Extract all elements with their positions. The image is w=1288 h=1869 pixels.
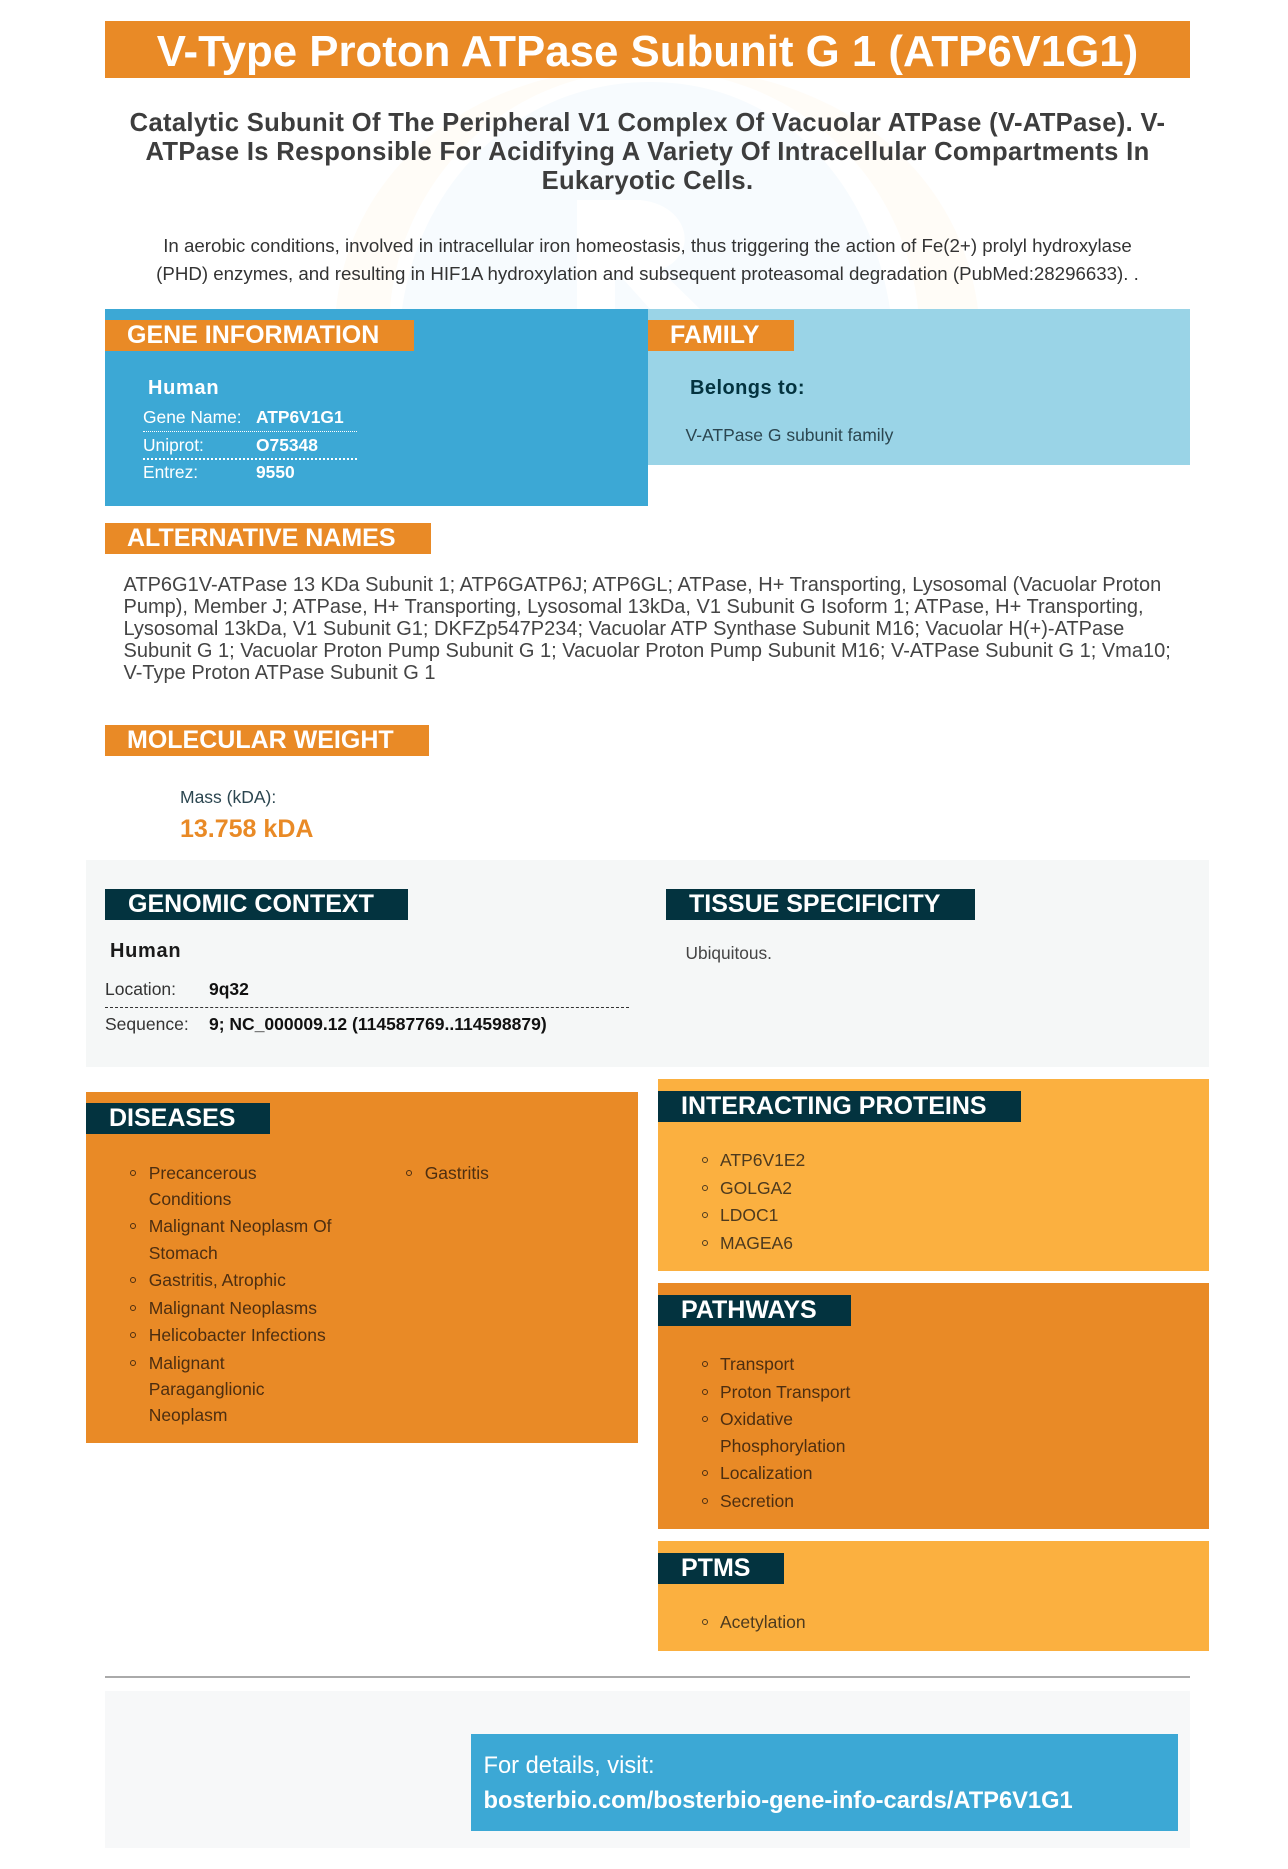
heading: pathways: PATHWAYS [681, 1296, 817, 1324]
alternative names text: Pump), Member J; ATPase, H+ Transporting, Lysosomal 13kDa, V1 Subunit G Isoform 1; ATPase, H+ Transporting, [124, 596, 1144, 618]
pathway list: Proton Transport [720, 1382, 850, 1402]
protein list [702, 1150, 805, 1253]
protein list: MAGEA6 [720, 1233, 793, 1253]
panel: genomic context and tissue specificity: 9q32 [209, 978, 249, 998]
heading: genomic context: GENOMIC CONTEXT [128, 890, 374, 918]
protein list: GOLGA2 [720, 1178, 792, 1198]
gene table: Entrez: [143, 462, 198, 482]
alternative names text: ATP6G1V-ATPase 13 KDa Subunit 1; ATP6GATP6J; ATP6GL; ATPase, H+ Transporting, Lysosomal (Vacuolar Proton [124, 574, 1161, 596]
disease list: Precancerous [149, 1163, 257, 1183]
disease list [130, 1163, 489, 1425]
heading: ptms [658, 1553, 784, 1584]
alternative names text: V-Type Proton ATPase Subunit G 1 [124, 662, 436, 684]
sequence row [105, 1007, 629, 1008]
pathway list [702, 1354, 850, 1511]
panel: genomic context and tissue specificity: Sequence: [105, 1014, 189, 1034]
heading: interacting proteins: INTERACTING PROTEINS [681, 1092, 987, 1120]
panel: diseases [86, 1092, 638, 1443]
panel: ptms [658, 1541, 1209, 1651]
ptm list: Acetylation [720, 1612, 806, 1632]
belongs to label: Belongs to: [690, 377, 805, 399]
heading: alternative names: ALTERNATIVE NAMES [127, 524, 396, 552]
species label: Human [148, 377, 219, 399]
alternative names text: Lysosomal 13kDa, V1 Subunit G1; DKFZp547P234; Vacuolar ATP Synthase Subunit M16; Vacuolar H(+)-ATPase [124, 618, 1124, 640]
pathway list: Phosphorylation [720, 1436, 846, 1456]
disease list: Malignant [149, 1353, 225, 1373]
background watermark logo [0, 0, 1288, 520]
panel: family [648, 309, 1190, 465]
gene table: 9550 [256, 462, 295, 482]
heading: pathways [658, 1295, 851, 1326]
callout: details link [471, 1734, 1178, 1831]
family text: V-ATPase G subunit family [686, 425, 893, 445]
disease list: Malignant Neoplasms [149, 1298, 317, 1318]
heading: tissue specificity: TISSUE SPECIFICITY [689, 890, 940, 918]
disease list: Conditions [149, 1189, 231, 1209]
heading: diseases [86, 1103, 270, 1134]
gene table: ATP6V1G1 [256, 407, 344, 427]
title: V-Type Proton ATPase Subunit G 1 (ATP6V1G1) [157, 27, 1138, 76]
disease list: Helicobacter Infections [149, 1325, 326, 1345]
description [156, 234, 1139, 284]
description: In aerobic conditions, involved in intracellular iron homeostasis, thus triggering the action of Fe(2+) prolyl hydroxylase [163, 234, 1132, 256]
pathway list: Transport [720, 1354, 794, 1374]
heading: family [648, 320, 794, 351]
disease list: Malignant Neoplasm Of [149, 1216, 332, 1236]
protein list: LDOC1 [720, 1205, 778, 1225]
subtitle [130, 108, 1165, 194]
heading: diseases: DISEASES [109, 1104, 235, 1132]
location row: Location: [105, 978, 176, 998]
disease list: Gastritis [425, 1163, 489, 1183]
tissue text: Ubiquitous. [686, 943, 772, 963]
gene table: Gene Name: [143, 407, 242, 427]
footer panel [105, 1691, 1190, 1848]
subtitle: Catalytic Subunit Of The Peripheral V1 Complex Of Vacuolar ATPase (V-ATPase). V- [130, 108, 1165, 136]
alternative names text: Subunit G 1; Vacuolar Proton Pump Subunit G 1; Vacuolar Proton Pump Subunit M16; V-ATPase Subunit G 1; Vma10; [124, 640, 1171, 662]
pathway list: Localization [720, 1463, 812, 1483]
callout: details link: bosterbio.com/bosterbio-gene-info-cards/ATP6V1G1 [484, 1788, 1073, 1814]
disease list: Gastritis, Atrophic [149, 1270, 286, 1290]
subtitle: Eukaryotic Cells. [542, 166, 753, 194]
gene table: O75348 [256, 435, 318, 455]
panel: pathways [658, 1283, 1209, 1529]
subtitle: ATPase Is Responsible For Acidifying A Variety Of Intracellular Compartments In [145, 138, 1150, 166]
heading: gene information: GENE INFORMATION [127, 321, 379, 349]
disease list: Stomach [149, 1243, 218, 1263]
gene table [143, 407, 357, 482]
callout: details link: For details, visit: [484, 1753, 655, 1779]
pathway list: Oxidative [720, 1409, 793, 1429]
gene table: Uniprot: [143, 435, 204, 455]
mass label: Mass (kDA): [180, 787, 276, 807]
panel: gene information [105, 309, 648, 506]
description: (PHD) enzymes, and resulting in HIF1A hydroxylation and subsequent proteasomal degradation (PubMed:28296633). . [156, 262, 1139, 284]
panel: genomic context and tissue specificity [86, 860, 1209, 1067]
panel: interacting proteins [658, 1079, 1209, 1271]
heading: family: FAMILY [670, 321, 759, 349]
pathway list: Secretion [720, 1491, 794, 1511]
disease list: Neoplasm [149, 1405, 227, 1425]
heading: molecular weight: MOLECULAR WEIGHT [127, 726, 394, 754]
heading: ptms: PTMS [681, 1554, 750, 1582]
protein list: ATP6V1E2 [720, 1150, 805, 1170]
disease list: Paraganglionic [149, 1379, 264, 1399]
mass value: 13.758 kDA [180, 815, 313, 843]
panel: genomic context and tissue specificity: 9; NC_000009.12 (114587769..114598879) [209, 1014, 547, 1034]
species label: Human [110, 940, 181, 962]
alternative names text [124, 574, 1171, 684]
